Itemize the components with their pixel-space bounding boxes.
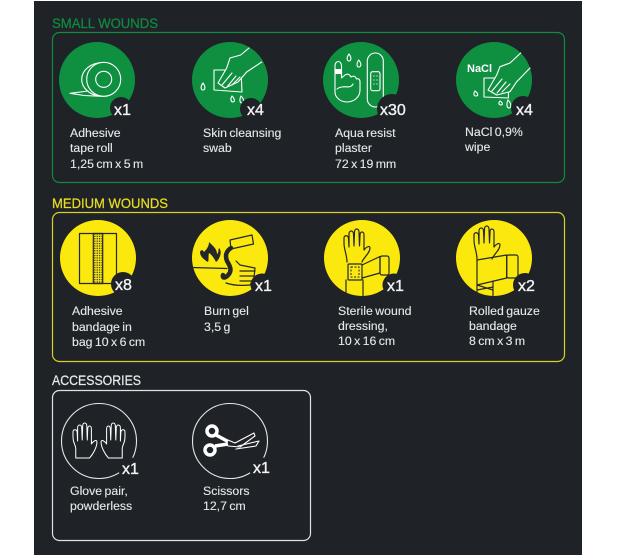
item: NaCl wipe: NaCl 0,9% <box>465 125 523 139</box>
panel: small wounds <box>52 32 564 182</box>
item: aqua resist plaster: 72 x 19 mm <box>335 157 396 171</box>
item: sterile wound dressing: x1 <box>387 278 404 295</box>
item: burn gel: 3,5 g <box>204 320 231 334</box>
item: rolled gauze bandage: 8 cm x 3 m <box>469 334 525 348</box>
item: adhesive bandage: bandage in <box>72 320 132 334</box>
item: scissors: x1 <box>253 460 270 477</box>
item: burn gel: x1 <box>255 278 272 295</box>
item: glove pair <box>62 404 140 513</box>
item: NaCl wipe: wipe <box>464 140 490 154</box>
item: aqua resist plaster <box>323 42 407 171</box>
panel: medium wounds <box>52 212 564 362</box>
item: sterile wound dressing <box>324 220 412 348</box>
item: sterile wound dressing: Sterile wound <box>338 304 412 318</box>
item: skin cleansing swab: swab <box>203 141 232 155</box>
item: adhesive bandage: bag 10 x 6 cm <box>72 335 145 349</box>
item: adhesive bandage: x8 <box>115 277 132 294</box>
item: rolled gauze bandage: bandage <box>469 319 517 333</box>
item: glove pair: powderless <box>70 499 132 513</box>
item: skin cleansing swab <box>192 42 281 155</box>
item: aqua resist plaster: x30 <box>380 102 406 119</box>
item: rolled gauze bandage <box>456 220 540 348</box>
item: adhesive tape roll: Adhesive <box>70 126 121 140</box>
item: NaCl wipe <box>456 42 535 154</box>
item: rolled gauze bandage: x2 <box>518 278 535 295</box>
item: scissors: 12,7 cm <box>203 499 246 513</box>
item: aqua resist plaster: plaster <box>335 141 372 155</box>
item: skin cleansing swab: Skin cleansing <box>203 126 281 140</box>
item: skin cleansing swab: x4 <box>247 102 264 119</box>
item: adhesive bandage <box>60 220 145 349</box>
item: adhesive bandage: Adhesive <box>72 304 123 318</box>
item: adhesive tape roll <box>59 42 143 171</box>
item: adhesive tape roll: 1,25 cm x 5 m <box>70 157 143 171</box>
item: adhesive tape roll: tape roll <box>70 141 113 155</box>
item: glove pair: Glove pair, <box>70 484 128 498</box>
item: burn gel <box>192 220 274 334</box>
item: NaCl wipe: x4 <box>516 102 533 119</box>
heading: medium wounds: MEDIUM WOUNDS <box>52 195 168 211</box>
item: rolled gauze bandage: Rolled gauze <box>469 304 540 318</box>
item: sterile wound dressing: 10 x 16 cm <box>338 334 395 348</box>
item: sterile wound dressing: dressing, <box>338 319 388 333</box>
panel: accessories <box>52 390 310 540</box>
heading: accessories: ACCESSORIES <box>52 372 141 388</box>
item: burn gel: Burn gel <box>204 304 249 318</box>
item: NaCl wipe: NaCl <box>467 63 492 75</box>
item: adhesive tape roll: x1 <box>114 102 131 119</box>
item: glove pair: x1 <box>122 461 139 478</box>
item: scissors: Scissors <box>203 484 249 498</box>
item: scissors <box>192 404 271 513</box>
heading: small wounds: SMALL WOUNDS <box>52 15 158 31</box>
item: aqua resist plaster: Aqua resist <box>335 126 396 140</box>
